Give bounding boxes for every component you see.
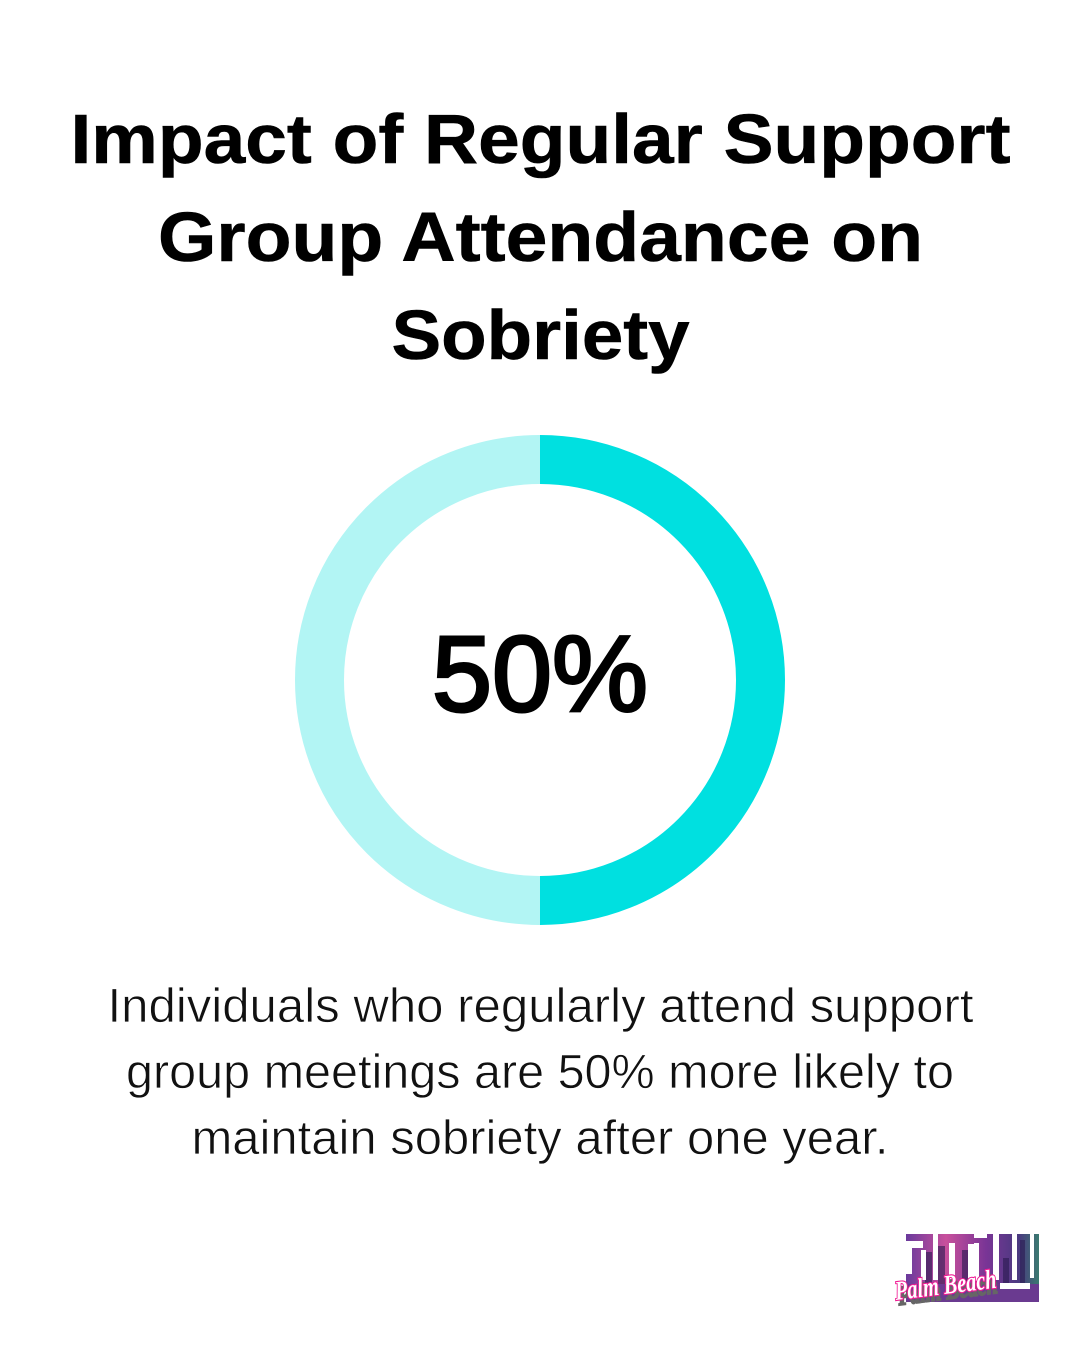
title — [70, 100, 1010, 374]
title: Sobriety — [392, 296, 690, 374]
logo script shadow: Palm Beach — [895, 1269, 999, 1311]
description text: maintain sobriety after one year. — [192, 1112, 889, 1165]
description text — [108, 980, 973, 1165]
logo script: Palm Beach: Palm Beach — [892, 1264, 998, 1306]
donut filled segment — [540, 460, 760, 900]
logo background cityscape — [906, 1234, 1039, 1302]
description text: group meetings are 50% more likely to — [126, 1046, 954, 1099]
logo: Amity Palm Beach — [892, 1229, 1039, 1311]
description text: Individuals who regularly attend support — [108, 980, 973, 1033]
donut remaining segment — [320, 460, 540, 900]
title: Impact of Regular Support — [70, 100, 1010, 178]
center value: 50% — [432, 613, 648, 734]
logo white letterforms — [906, 1229, 1034, 1289]
donut chart: 50% — [320, 460, 760, 900]
title: Group Attendance on — [158, 198, 923, 276]
